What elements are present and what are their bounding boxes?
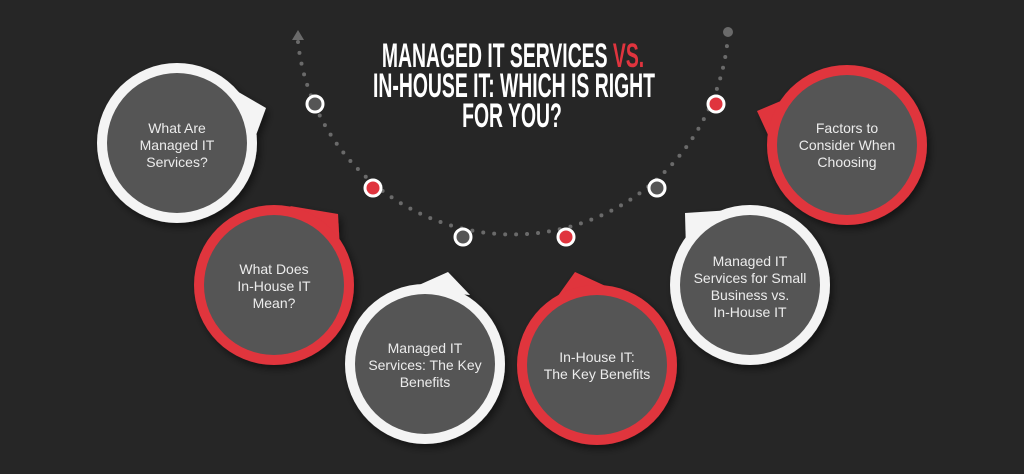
bubble 4: In-House IT Key Benefits: In-House IT: [559, 349, 635, 365]
bubble 3: Managed IT Services Key Benefits: Benefits [400, 374, 450, 390]
bubble 5: Managed IT for Small Business: In-House IT [713, 304, 787, 320]
arrow head [292, 30, 304, 40]
title [373, 36, 655, 134]
bubble 2: What Does In-House IT Mean: In-House IT [237, 278, 311, 294]
bubble 1: What Are Managed IT Services [97, 63, 266, 223]
title: FOR YOU? [462, 96, 562, 134]
bubble 3: Managed IT Services Key Benefits: Managed IT [388, 340, 463, 356]
bubble 1: What Are Managed IT Services: Services? [146, 154, 208, 170]
arc markers [307, 96, 724, 245]
bubble 5: Managed IT for Small Business [670, 205, 830, 365]
bubble 6: Factors to Consider: Factors to [816, 120, 878, 136]
bubble 2: What Does In-House IT Mean [194, 205, 354, 365]
bubble 5: Managed IT for Small Business: Managed IT [713, 253, 788, 269]
title: IN-HOUSE IT: WHICH IS RIGHT [373, 66, 655, 104]
bubble 2: What Does In-House IT Mean: Mean? [253, 295, 296, 311]
bubble 5: Managed IT for Small Business: Services for Small [694, 270, 806, 286]
bubble 1: What Are Managed IT Services: What Are [148, 120, 206, 136]
bubble 4: In-House IT Key Benefits: The Key Benefits [544, 366, 650, 382]
bubble 6: Factors to Consider: Consider When [799, 137, 895, 153]
bubble 3: Managed IT Services Key Benefits [345, 272, 505, 444]
bubble 6: Factors to Consider: Choosing [817, 154, 877, 170]
bubble 6: Factors to Consider [757, 65, 927, 225]
bubble 4: In-House IT Key Benefits [517, 272, 677, 445]
bubble 1: What Are Managed IT Services: Managed IT [140, 137, 215, 153]
bubble 2: What Does In-House IT Mean: What Does [239, 261, 309, 277]
bubble 3: Managed IT Services Key Benefits: Services: The Key [368, 357, 482, 373]
bubble 5: Managed IT for Small Business: Business vs. [711, 287, 789, 303]
dotted arc path [292, 27, 733, 234]
title: MANAGED IT SERVICES VS. [382, 36, 644, 74]
